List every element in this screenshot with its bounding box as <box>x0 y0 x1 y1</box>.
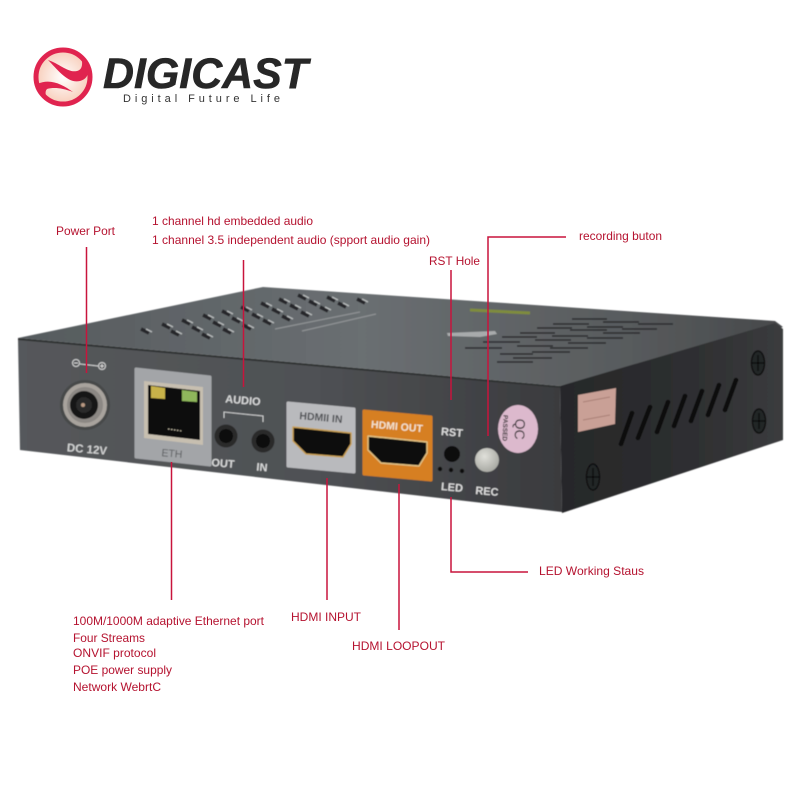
label: audio features: 1 channel hd embedded audio <box>152 214 313 228</box>
QC sticker: PASSED <box>501 415 508 442</box>
audio section <box>211 393 274 474</box>
audio out label: OUT <box>211 457 235 471</box>
logo wordmark: DIGICAST <box>103 50 312 98</box>
audio out jack <box>214 424 238 448</box>
HDMI in port <box>293 427 351 457</box>
LED status leader <box>451 497 528 572</box>
HDMI in plate <box>288 403 354 472</box>
HDMI loopout leader <box>398 484 400 630</box>
DC 12V label: DC 12V <box>66 442 108 458</box>
label: ethernet features <box>73 614 265 694</box>
top label marks <box>275 310 530 337</box>
QC sticker <box>498 405 538 453</box>
audio in jack <box>252 430 274 452</box>
label: ethernet features: Four Streams <box>73 631 145 645</box>
HDMI input leader <box>326 478 328 600</box>
logo <box>36 50 312 105</box>
label: recording button: recording buton <box>579 229 662 243</box>
HDMI in label: HDMII IN <box>299 410 343 426</box>
label: power port: Power Port <box>56 224 116 238</box>
label: ethernet features: 100M/1000M adaptive Ethernet port <box>73 614 265 628</box>
HDMI out label: HDMI OUT <box>371 419 424 435</box>
callout lines <box>86 237 566 630</box>
device top face <box>18 287 783 386</box>
label: ethernet features: POE power supply <box>73 663 172 677</box>
RST label: RST <box>440 426 464 440</box>
recording button leader <box>488 237 566 436</box>
REC label: REC <box>475 485 499 499</box>
audio in label: IN <box>256 462 268 474</box>
logo emblem <box>36 50 90 104</box>
top vents right <box>465 319 673 362</box>
audio label: AUDIO <box>225 393 262 409</box>
power symbol <box>72 360 106 370</box>
logo tagline: Digital Future Life <box>123 93 280 105</box>
DC power jack <box>60 380 110 430</box>
label: HDMI input: HDMI INPUT <box>291 610 362 624</box>
HDMI out plate <box>364 411 431 480</box>
device <box>18 287 783 513</box>
LED label: LED <box>440 481 463 495</box>
HDMI out port <box>368 436 427 466</box>
REC button <box>475 448 499 472</box>
audio bracket <box>224 412 263 422</box>
side sticker <box>578 388 616 432</box>
ETH plate <box>136 369 210 465</box>
RST hole leader <box>450 270 452 400</box>
audio leader <box>242 260 244 387</box>
power port leader <box>86 247 88 373</box>
label: audio features <box>152 214 430 247</box>
side screws <box>586 351 766 490</box>
device side face <box>560 323 783 513</box>
label: ethernet features: ONVIF protocol <box>73 646 156 660</box>
label: audio features: 1 channel 3.5 independent audio (spport audio gain) <box>152 233 430 247</box>
side vents <box>621 380 736 444</box>
ETH label: ETH <box>161 447 183 461</box>
callout labels <box>56 214 662 694</box>
label: LED status: LED Working Staus <box>539 564 644 578</box>
QC sticker: QC <box>512 418 528 440</box>
label: RST hole: RST Hole <box>429 254 480 268</box>
label: ethernet features: Network WebrtC <box>73 680 161 694</box>
device front edge highlight <box>18 339 560 387</box>
top vents left <box>141 295 368 338</box>
RST hole <box>444 446 460 462</box>
device front face <box>18 339 562 512</box>
LED indicators <box>438 467 464 473</box>
ethernet leader <box>170 462 172 600</box>
label: HDMI loopout: HDMI LOOPOUT <box>352 639 446 653</box>
